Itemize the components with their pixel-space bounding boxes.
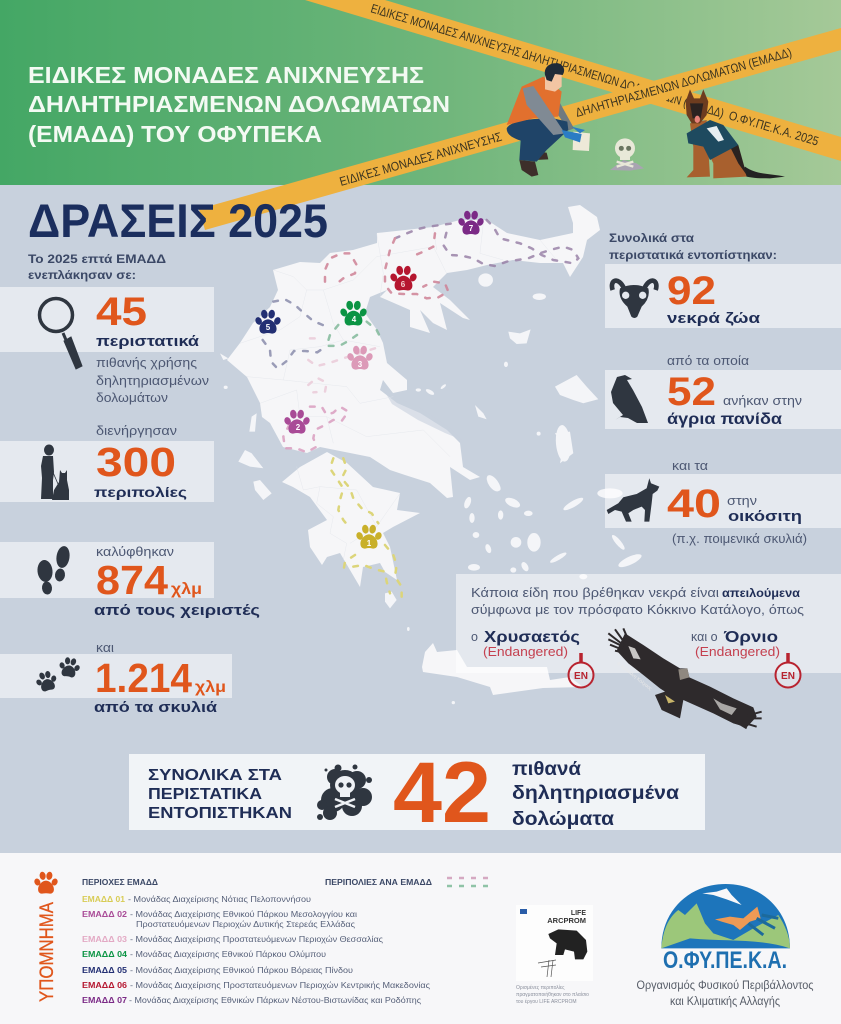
caution tape 1: Ο.ΦΥ.ΠΕ.Κ.Α. 2025 bbox=[727, 108, 820, 149]
description: πιθανής χρήσης bbox=[96, 356, 197, 370]
paw 3: 3 bbox=[358, 360, 363, 369]
legend: patrol dashes bbox=[447, 878, 488, 886]
paw 5 bbox=[254, 309, 282, 334]
caption bbox=[512, 759, 679, 830]
panel: 52 wildlife: από τα οποία bbox=[667, 354, 749, 368]
legend row 06: - Μονάδας Διαχείρισης Προστατευόμενων Περιοχών Κεντρικής Μακεδονίας bbox=[130, 981, 430, 990]
chest and front legs bbox=[687, 120, 710, 177]
Crete bbox=[422, 643, 583, 695]
intro: left column bbox=[28, 254, 166, 282]
LIFE ARCPROM badge: LIFE bbox=[571, 910, 586, 917]
badge: EN vulture bbox=[776, 653, 800, 688]
header title: ΔΗΛΗΤΗΡΙΑΣΜΕΝΩΝ ΔΟΛΩΜΑΤΩΝ bbox=[28, 91, 450, 117]
hair bbox=[545, 63, 564, 82]
gloves bbox=[562, 127, 585, 142]
number 52: 52 bbox=[667, 370, 716, 414]
vulture label bbox=[691, 629, 780, 659]
text: Κάποια είδη που βρέθηκαν νεκρά είναι bbox=[471, 586, 719, 600]
label: περιπολίες bbox=[94, 484, 187, 500]
caption: δηλητηριασμένα bbox=[512, 783, 679, 804]
paw 2 bbox=[283, 409, 311, 434]
patrol routes bbox=[263, 220, 578, 452]
far boot bbox=[533, 152, 548, 160]
text: σύμφωνα με τον πρόσφατο Κόκκινο Κατάλογο, όπως bbox=[471, 603, 804, 617]
legend heading: patrols: ΠΕΡΙΠΟΛΙΕΣ ΑΝΑ ΕΜΑΔΔ bbox=[325, 878, 432, 887]
description: δολωμάτων bbox=[96, 391, 168, 405]
face bbox=[545, 70, 562, 92]
intro: right column: περιστατικά εντοπίστηκαν: bbox=[609, 250, 777, 262]
panel: 45 incidents bbox=[0, 287, 214, 405]
vulture label: Όρνιο bbox=[723, 629, 778, 646]
footer band bbox=[0, 853, 841, 1024]
mainland bbox=[227, 205, 600, 498]
label: οικόσιτη bbox=[728, 508, 802, 525]
panel: endangered species bbox=[456, 574, 841, 673]
legend row 07: - Μονάδας Διαχείρισης Εθνικών Πάρκων Νέστου-Βιστωνίδας και Ροδόπης bbox=[129, 996, 421, 1005]
dog illustration bbox=[686, 89, 785, 178]
icon: footprints bbox=[36, 545, 71, 595]
panel: 1214 km: χλμ bbox=[195, 679, 226, 696]
paw 4 bbox=[339, 300, 368, 326]
intro: right column: Συνολικά στα bbox=[609, 233, 694, 245]
paw 4: 4 bbox=[352, 315, 357, 324]
heading: ΕΝΤΟΠΙΣΤΗΚΑΝ bbox=[148, 805, 292, 822]
paw 7 bbox=[457, 210, 485, 235]
route: ΕΜΑΔΔ 07 bbox=[395, 220, 578, 266]
badge: EN vulture: EN bbox=[781, 671, 795, 682]
panel: 300 patrols bbox=[0, 424, 214, 502]
eagle photo bbox=[608, 628, 762, 728]
fox bbox=[715, 907, 761, 930]
panel: 874 km bbox=[0, 542, 260, 619]
header title: ΕΙΔΙΚΕΣ ΜΟΝΑΔΕΣ ΑΝΙΧΝΕΥΣΗΣ bbox=[28, 62, 424, 88]
Evia channel bbox=[385, 392, 462, 440]
route: ΕΜΑΔΔ 02 bbox=[283, 407, 348, 452]
paw 6: 6 bbox=[401, 280, 406, 289]
route: ΕΜΑΔΔ 06 bbox=[325, 233, 448, 298]
OFYPEKA logo bbox=[636, 884, 814, 1008]
dome bbox=[661, 884, 790, 948]
eagle photo: © Βαλλιάνη Κόλχαος bbox=[616, 660, 654, 692]
OFYPEKA logo: Ο.ΦΥ.ΠΕ.Κ.Α. bbox=[663, 947, 787, 974]
number 42: 42 bbox=[393, 745, 491, 841]
paw 2: 2 bbox=[296, 423, 301, 432]
paw 7: 7 bbox=[469, 224, 474, 233]
label: νεκρά ζώα bbox=[667, 310, 761, 327]
icon: poison splat with skull bbox=[317, 764, 372, 820]
caption: δολώματα bbox=[512, 809, 614, 830]
route: ΕΜΑΔΔ 01 bbox=[330, 458, 402, 597]
legend row 04: - Μονάδας Διαχείρισης Εθνικού Πάρκου Ολύμπου bbox=[130, 950, 326, 959]
head bbox=[686, 89, 708, 123]
number 300: 300 bbox=[96, 439, 176, 485]
far arm bbox=[555, 100, 574, 131]
panel: 40 domestic: στην bbox=[727, 494, 757, 508]
number 40: 40 bbox=[667, 482, 721, 526]
vest bbox=[507, 77, 562, 125]
vest bbox=[687, 120, 738, 160]
legend row 01: - Μονάδας Διαχείρισης Νότιας Πελοποννήσου bbox=[128, 895, 311, 904]
icon: paw prints bbox=[33, 656, 82, 693]
LIFE ARCPROM badge: ARCPROM bbox=[547, 916, 586, 925]
number 45: 45 bbox=[96, 290, 147, 334]
intro: left column: ενεπλάκησαν σε: bbox=[28, 270, 136, 282]
badge: EN golden eagle: EN bbox=[574, 671, 588, 682]
number 1214 km: 1.214 bbox=[95, 655, 192, 701]
golden eagle label: (Endangered) bbox=[483, 645, 568, 659]
panel: 40 domestic: και τα bbox=[672, 459, 708, 473]
legend row 02: - Μονάδας Διαχείρισης Εθνικού Πάρκου Μεσολογγίου και bbox=[130, 910, 357, 919]
legend row 06: ΕΜΑΔΔ 06 bbox=[82, 981, 128, 990]
icon: ram skull bbox=[612, 281, 656, 318]
legend row 02: Προστατευόμενων Περιοχών Δυτικής Στερεάς Ελλάδας bbox=[136, 920, 355, 929]
main heading: ΔΡΑΣΕΙΣ 2025 bbox=[28, 194, 328, 247]
panel: 40 domestic bbox=[605, 459, 841, 546]
legend heading: areas: ΠΕΡΙΟΧΕΣ ΕΜΑΔΔ bbox=[82, 878, 158, 887]
islands bbox=[220, 273, 598, 494]
badge: EN golden eagle bbox=[568, 653, 594, 688]
legend title: ΥΠΟΜΝΗΜΑ bbox=[37, 902, 58, 1002]
skull and crossbones illustration bbox=[610, 138, 644, 171]
legend row 07: ΕΜΑΔΔ 07 bbox=[82, 996, 128, 1005]
icon: magnifying glass bbox=[40, 298, 82, 369]
plumes bbox=[748, 915, 778, 935]
route: ΕΜΑΔΔ 05 bbox=[263, 299, 327, 368]
intro: right column bbox=[609, 233, 777, 262]
hind body bbox=[707, 147, 747, 178]
near arm bbox=[523, 86, 565, 135]
caution tape 2: ΕΙΔΙΚΕΣ ΜΟΝΑΔΕΣ ΑΝΙΧΝΕΥΣΗΣ bbox=[338, 130, 504, 189]
paper bbox=[573, 132, 590, 151]
panel: 92 dead animals bbox=[605, 264, 841, 328]
legend row 02: ΕΜΑΔΔ 02 bbox=[82, 910, 128, 919]
route: ΕΜΑΔΔ 04 bbox=[327, 322, 382, 346]
label: περιστατικά bbox=[96, 334, 199, 350]
panel: 300 patrols: διενήργησαν bbox=[96, 424, 177, 438]
caution tape 2: ΔΗΛΗΤΗΡΙΑΣΜΕΝΩΝ ΔΟΛΩΜΑΤΩΝ (ΕΜΑΔΔ) bbox=[574, 45, 793, 120]
label: από τα σκυλιά bbox=[94, 699, 218, 716]
icon: vulture bbox=[611, 375, 648, 423]
icon: dog bbox=[607, 478, 659, 522]
number 874 km: 874 bbox=[96, 557, 168, 603]
caption: του έργου LIFE ARCPROM bbox=[516, 998, 577, 1005]
panel: 874 km: χλμ bbox=[171, 581, 202, 598]
near boot bbox=[519, 160, 538, 177]
caption: πιθανά bbox=[512, 759, 581, 780]
hills and trees bbox=[661, 903, 790, 948]
text bbox=[471, 586, 804, 617]
panel: 42 poisoned baits bbox=[129, 745, 705, 841]
panel: 874 km: καλύφθηκαν bbox=[96, 545, 174, 559]
caption: πραγματοποιήθηκαν στο πλαίσιο bbox=[516, 991, 589, 998]
route: ΕΜΑΔΔ 03 bbox=[308, 338, 375, 392]
panel: 52 wildlife bbox=[605, 354, 841, 429]
golden eagle label bbox=[471, 629, 580, 659]
legend bbox=[33, 871, 488, 1005]
header title: (ΕΜΑΔΔ) ΤΟΥ ΟΦΥΠΕΚΑ bbox=[28, 121, 322, 147]
header title bbox=[28, 62, 450, 147]
heading: ΣΥΝΟΛΙΚΑ ΣΤΑ bbox=[148, 767, 283, 784]
heading bbox=[148, 767, 292, 822]
panel: 52 wildlife: ανήκαν στην bbox=[723, 394, 802, 408]
gull bbox=[702, 888, 742, 905]
OFYPEKA logo: και Κλιματικής Αλλαγής bbox=[670, 996, 780, 1008]
tail bbox=[742, 167, 785, 178]
paw 1 bbox=[355, 524, 383, 549]
panel: 1214 km: και bbox=[96, 641, 114, 655]
paw 5: 5 bbox=[266, 323, 271, 332]
header band bbox=[0, 0, 841, 185]
caption bbox=[516, 984, 589, 1005]
bear bbox=[548, 929, 587, 959]
paw 3 bbox=[346, 345, 374, 370]
Peloponnese bbox=[282, 452, 420, 587]
description: δηλητηριασμένων bbox=[96, 374, 209, 388]
intro: left column: Το 2025 επτά ΕΜΑΔΔ bbox=[28, 254, 166, 266]
heading: ΠΕΡΙΣΤΑΤΙΚΑ bbox=[148, 786, 262, 803]
OFYPEKA logo: Οργανισμός Φυσικού Περιβάλλοντος bbox=[636, 980, 814, 992]
text: απειλούμενα bbox=[722, 586, 801, 600]
paw 6 bbox=[389, 265, 418, 291]
trousers bbox=[507, 118, 568, 162]
caption: Ορισμένες περιπολίες bbox=[516, 984, 565, 991]
legend row 05: ΕΜΑΔΔ 05 bbox=[82, 966, 128, 975]
legend row 02 bbox=[82, 910, 357, 929]
note: (π.χ. ποιμενικά σκυλιά) bbox=[672, 532, 807, 546]
description bbox=[96, 356, 209, 405]
vulture label: (Endangered) bbox=[695, 645, 780, 659]
vulture label: και ο bbox=[691, 630, 718, 644]
label: άγρια πανίδα bbox=[667, 411, 783, 428]
legend row 03: - Μονάδας Διαχείρισης Προστατευόμενων Περιοχών Θεσσαλίας bbox=[130, 935, 383, 944]
paw 1: 1 bbox=[367, 539, 372, 548]
icon: person with dog bbox=[41, 444, 69, 500]
legend row 01: ΕΜΑΔΔ 01 bbox=[82, 895, 126, 904]
legend row 05: - Μονάδας Διαχείρισης Εθνικού Πάρκου Βόρειας Πίνδου bbox=[130, 966, 353, 975]
icon: legend paw bbox=[33, 871, 59, 894]
legend row 03: ΕΜΑΔΔ 03 bbox=[82, 935, 128, 944]
map of Greece bbox=[220, 205, 643, 704]
label: από τους χειριστές bbox=[94, 602, 260, 619]
caution tape 1: ΕΙΔΙΚΕΣ ΜΟΝΑΔΕΣ ΑΝΙΧΝΕΥΣΗΣ ΔΗΛΗΤΗΡΙΑΣΜΕΝΩΝ ΔΟΛΩΜΑΤΩΝ (ΕΜΑΔΔ) bbox=[369, 1, 726, 121]
number 92: 92 bbox=[667, 269, 716, 313]
handler illustration bbox=[507, 63, 590, 177]
caution tape 2 bbox=[199, 28, 841, 230]
golden eagle label: Χρυσαετός bbox=[484, 629, 580, 646]
panel: 1214 km bbox=[0, 641, 232, 716]
golden eagle label: ο bbox=[471, 630, 478, 644]
regional borders bbox=[240, 223, 557, 457]
legend row 04: ΕΜΑΔΔ 04 bbox=[82, 950, 128, 959]
LIFE ARCPROM badge bbox=[516, 905, 593, 1005]
